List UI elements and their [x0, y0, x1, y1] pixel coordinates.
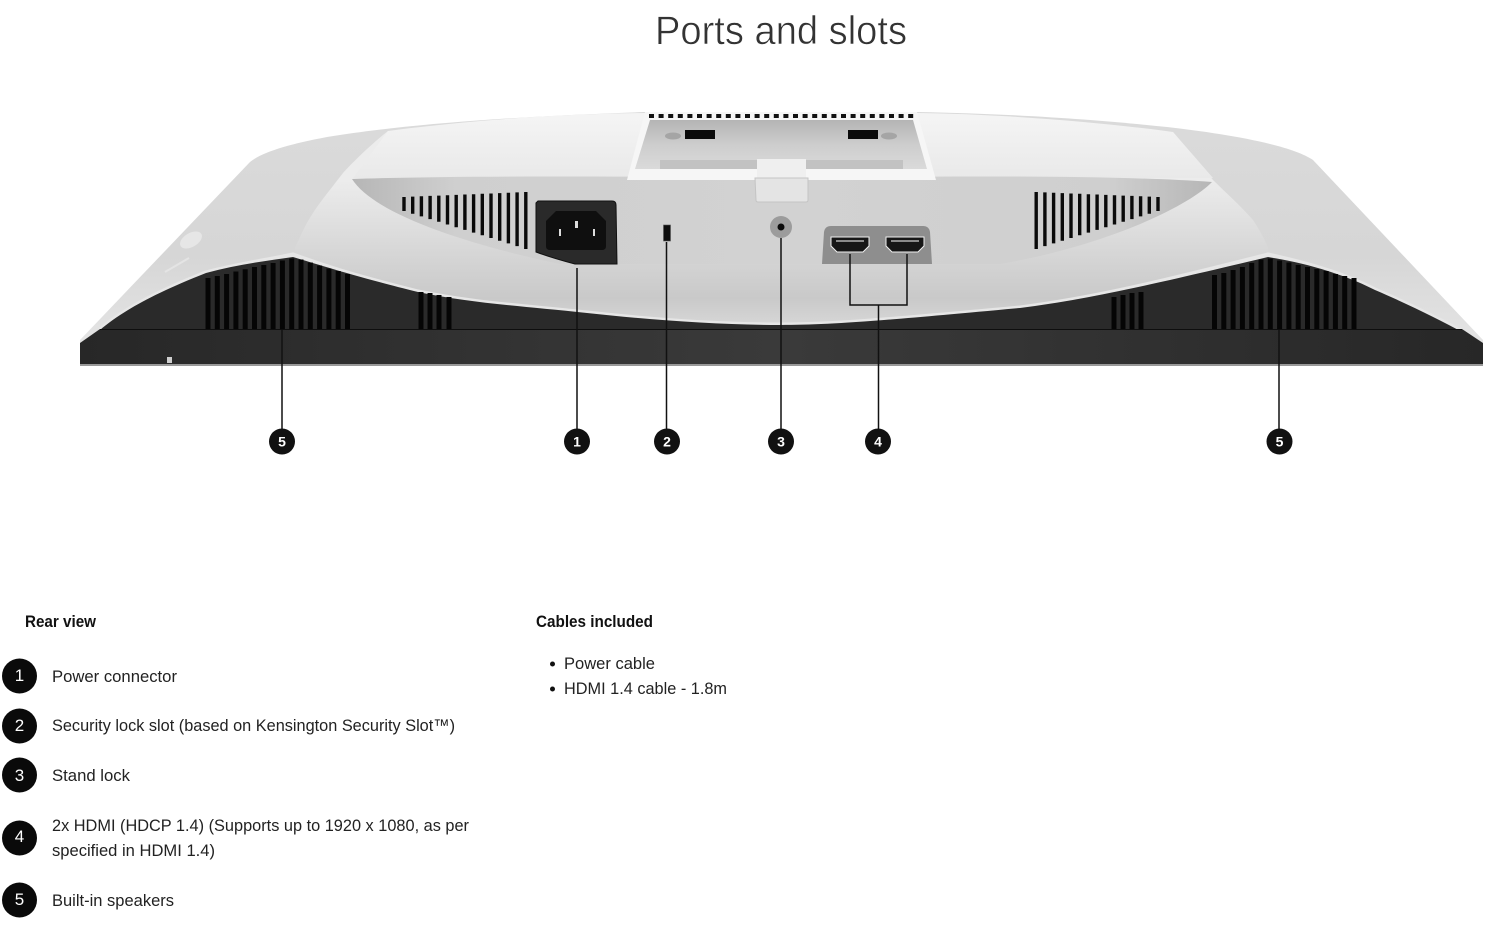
legend item 4: 4 [15, 827, 24, 846]
panel: rear view legend [2, 612, 469, 918]
callout marker 3 [768, 428, 794, 454]
monitor rear view [80, 112, 1483, 366]
legend item 1: 1 [15, 666, 24, 685]
callout marker 5 right: 5 [1276, 434, 1284, 450]
lower inner panel [294, 131, 1268, 335]
title: Ports and slots [655, 9, 907, 53]
monitor outer shell [80, 112, 1483, 350]
heading: cables included: Cables included [536, 612, 653, 631]
stand lock [770, 216, 792, 238]
legend item 5: Built-in speakers [52, 891, 174, 910]
HDMI ports [822, 226, 932, 264]
upper top panel [353, 113, 1213, 178]
callout marker 3: 3 [777, 434, 785, 450]
callout marker 4 [865, 428, 891, 454]
legend item 2 [2, 708, 455, 744]
legend item 3 [2, 758, 130, 792]
vent right [1036, 192, 1158, 249]
callout marker 5 right [1266, 428, 1292, 454]
callout leader lines [282, 238, 1279, 430]
callout marker 5 left: 5 [278, 434, 286, 450]
legend item 1: Power connector [52, 667, 177, 686]
speaker grille right [1114, 258, 1354, 329]
legend item 4: 2x HDMI (HDCP 1.4) (Supports up to 1920 x 1080, as per [52, 816, 469, 835]
cable item: HDMI cable: HDMI 1.4 cable - 1.8m [564, 679, 727, 698]
power connector [536, 201, 617, 264]
callout marker 2 [654, 428, 680, 454]
stand mount recess [627, 112, 936, 202]
callout marker 4: 4 [874, 434, 882, 450]
dark lower housing [100, 257, 1462, 332]
legend item 4: specified in HDMI 1.4) [52, 841, 215, 860]
bottom bezel bar [80, 329, 1483, 364]
legend item 4 [2, 816, 469, 860]
legend item 3: Stand lock [52, 766, 130, 785]
legend item 5: 5 [15, 890, 24, 909]
recessed port area [352, 176, 1212, 264]
heading: rear view: Rear view [25, 612, 97, 631]
legend item 2: 2 [15, 716, 24, 735]
light edge above dark housing [100, 255, 1462, 332]
cable item: power cable: Power cable [564, 654, 655, 673]
legend item 5 [2, 882, 174, 918]
callout marker 1: 1 [573, 434, 581, 450]
status light [167, 357, 172, 363]
joystick button [165, 228, 205, 272]
callout marker 2: 2 [663, 434, 671, 450]
callout marker 5 left [269, 428, 295, 454]
legend item 2: Security lock slot (based on Kensington Security Slot™) [52, 716, 455, 735]
callout marker 1 [564, 428, 590, 454]
security lock slot [664, 225, 670, 241]
panel: cables included [536, 612, 727, 698]
speaker grille left [208, 258, 449, 329]
vent left [404, 192, 526, 249]
legend item 1 [2, 658, 177, 694]
legend item 3: 3 [15, 766, 24, 785]
